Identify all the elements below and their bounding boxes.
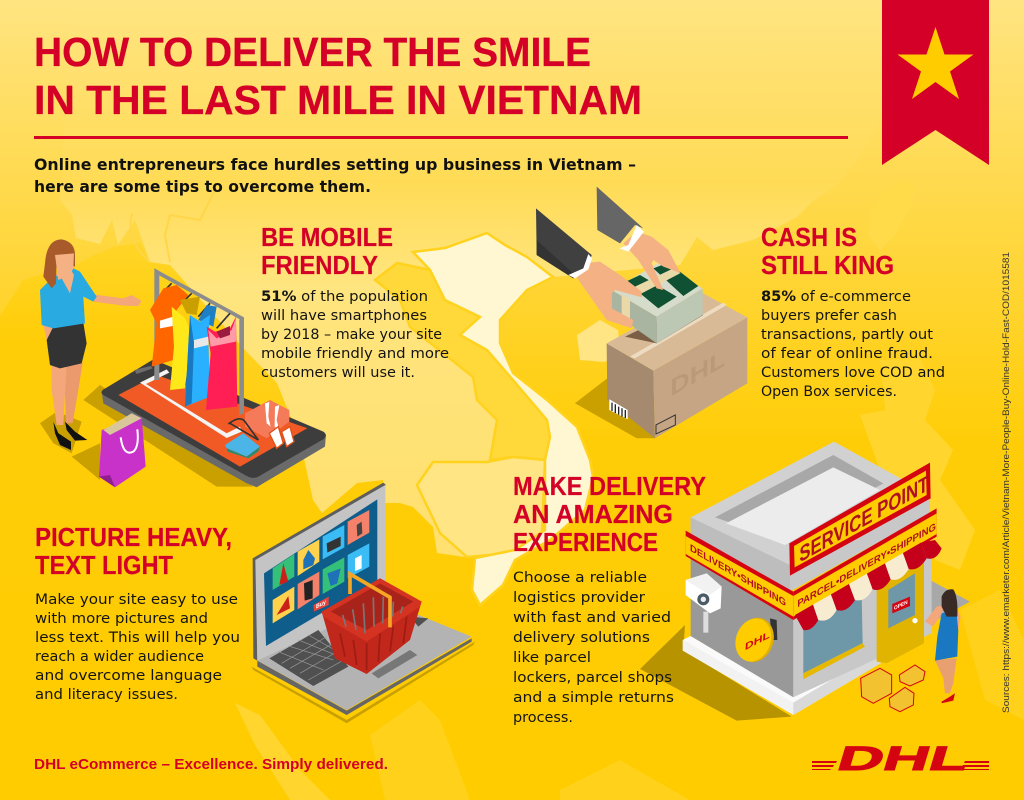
heading: make delivery an amazing experience: AN AMAZING <box>513 499 673 529</box>
text: cash is still king: buyers prefer cash <box>761 308 897 324</box>
text: be mobile friendly: customers will use it. <box>261 365 415 381</box>
illustration: DHL service point shop: DELIVERY•SHIPPING <box>690 543 786 610</box>
heading: be mobile friendly: FRIENDLY <box>261 250 378 280</box>
illustration: DHL service point shop: SERVICE POINT <box>799 470 929 568</box>
illustration: laptop with shopping basket <box>252 483 475 723</box>
text: picture heavy, text light: with more pictures and <box>35 611 208 627</box>
text: make delivery an amazing experience: with fast and varied <box>513 610 671 626</box>
text: cash is still king: transactions, partly out <box>761 327 933 343</box>
text: cash is still king: Customers love COD and <box>761 365 945 381</box>
text: make delivery an amazing experience: lockers, parcel shops <box>513 670 672 686</box>
illustration: DHL service point shop: DHL <box>744 629 771 652</box>
heading: make delivery an amazing experience: MAKE DELIVERY <box>513 471 706 501</box>
text: picture heavy, text light <box>35 592 240 703</box>
title <box>34 29 642 123</box>
text: make delivery an amazing experience: delivery solutions <box>513 630 650 646</box>
illustration: hands placing cash on box: DHL <box>667 347 728 401</box>
heading: be mobile friendly: BE MOBILE <box>261 222 393 252</box>
flag banner with star <box>882 0 989 165</box>
text: cash is still king: of fear of online fraud. <box>761 346 933 362</box>
text: picture heavy, text light: and literacy issues. <box>35 687 178 703</box>
text: make delivery an amazing experience: and a simple returns <box>513 690 674 706</box>
title: IN THE LAST MILE IN VIETNAM <box>34 77 642 123</box>
illustration: hands placing cash on box <box>536 187 747 438</box>
heading: picture heavy, text light <box>35 522 232 580</box>
illustration: DHL service point shop <box>640 442 970 721</box>
intro text: here are some tips to overcome them. <box>34 177 371 196</box>
illustration: laptop with shopping basket: Buy <box>316 599 327 611</box>
text: be mobile friendly: 51% of the population <box>261 289 428 305</box>
text: be mobile friendly <box>261 289 449 381</box>
illustration: DHL service point shop: OPEN <box>894 600 908 612</box>
text: make delivery an amazing experience: Choose a reliable <box>513 570 647 586</box>
heading: make delivery an amazing experience <box>513 471 706 557</box>
text: picture heavy, text light: reach a wider audience <box>35 649 204 665</box>
title rule <box>34 136 848 139</box>
text: cash is still king <box>761 289 945 400</box>
text: cash is still king: 85% of e-commerce <box>761 289 911 305</box>
intro text <box>34 155 636 196</box>
sources vertical text: Sources: https://www.emarketer.com/Article/Vietnam-More-People-Buy-Online-Hold-Fast-COD/1015581 <box>1001 252 1012 713</box>
illustration: DHL service point shop: PARCEL•DELIVERY•SHIPPING <box>797 521 936 610</box>
text: be mobile friendly: will have smartphones <box>261 308 427 324</box>
text: make delivery an amazing experience <box>513 570 674 726</box>
text: picture heavy, text light: and overcome language <box>35 668 222 684</box>
text: picture heavy, text light: less text. This will help you <box>35 630 240 646</box>
DHL logo <box>812 741 989 778</box>
heading: be mobile friendly <box>261 222 393 280</box>
text: make delivery an amazing experience: process. <box>513 710 573 726</box>
heading: picture heavy, text light: PICTURE HEAVY, <box>35 522 232 552</box>
heading: picture heavy, text light: TEXT LIGHT <box>35 550 173 580</box>
title: HOW TO DELIVER THE SMILE <box>34 29 591 75</box>
heading: cash is still king <box>761 222 894 280</box>
text: make delivery an amazing experience: like parcel <box>513 650 591 666</box>
heading: cash is still king: STILL KING <box>761 250 894 280</box>
footer tagline: DHL eCommerce – Excellence. Simply delivered. <box>34 756 388 773</box>
text: be mobile friendly: by 2018 – make your site <box>261 327 442 343</box>
text: cash is still king: Open Box services. <box>761 384 897 400</box>
text: picture heavy, text light: Make your site easy to use <box>35 592 238 608</box>
DHL logo: DHL <box>833 741 974 778</box>
intro text: Online entrepreneurs face hurdles setting up business in Vietnam – <box>34 155 636 174</box>
heading: make delivery an amazing experience: EXPERIENCE <box>513 527 658 557</box>
heading: cash is still king: CASH IS <box>761 222 857 252</box>
text: make delivery an amazing experience: logistics provider <box>513 590 645 606</box>
illustration: woman with phone shop <box>40 239 326 487</box>
text: be mobile friendly: mobile friendly and more <box>261 346 449 362</box>
